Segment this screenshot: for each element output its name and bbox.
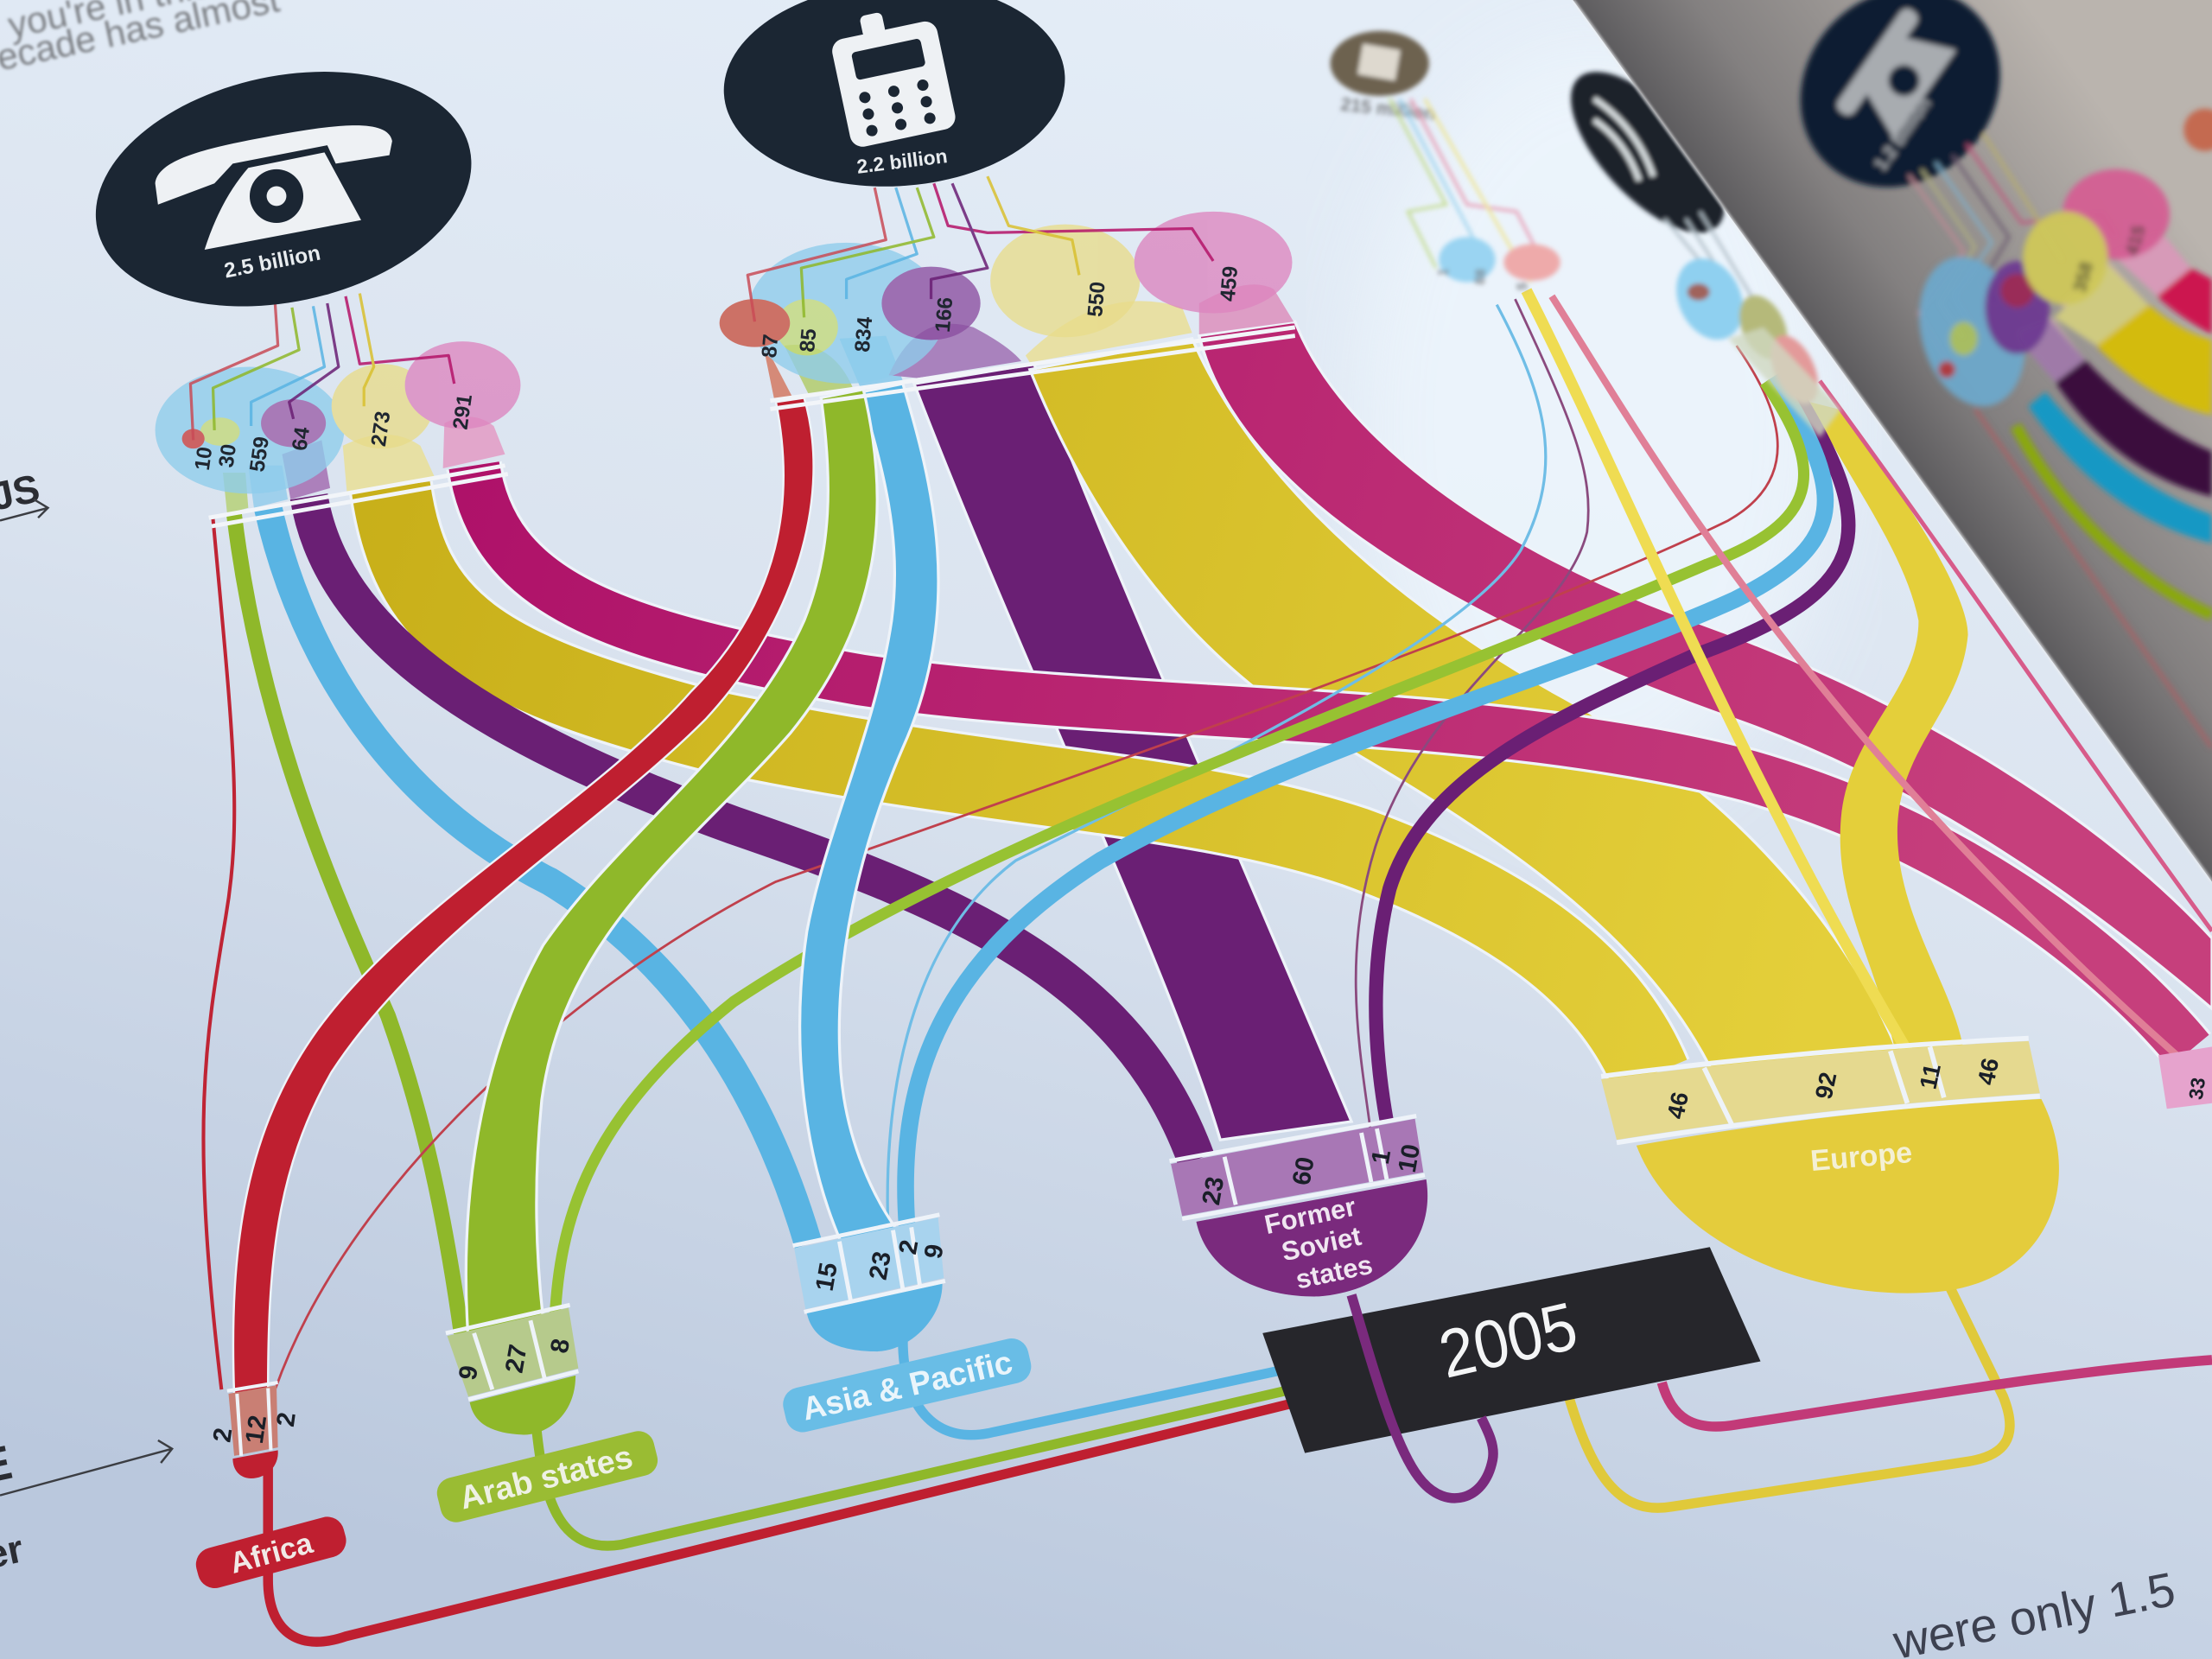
line: former Soviet loop (1351, 1295, 1493, 1498)
head: former Soviet states (1196, 1179, 1427, 1296)
values: former Soviet states: 10 (1393, 1142, 1426, 1175)
values: fixed lines: 10 (191, 445, 217, 472)
fade stubs under fixed lines bubbles (223, 416, 505, 513)
values: former Soviet states: 23 (1197, 1174, 1230, 1207)
values: Europe (1662, 1056, 2004, 1122)
values: fixed lines (191, 393, 477, 474)
band: fixed lines to Europe (391, 486, 1650, 1075)
mobile bands on top (233, 384, 938, 1394)
region: former Soviet states (1169, 1116, 1427, 1296)
circle: internet 215 million (1331, 31, 1429, 96)
values: internet: 5 (1515, 282, 1530, 291)
values: Asia and Pacific: 15 (810, 1261, 843, 1294)
label: former Soviet states: Former (1262, 1192, 1358, 1240)
line: Africa (268, 1403, 1291, 1642)
values: Arab states: 9 (454, 1363, 484, 1382)
label: former Soviet states: states (1293, 1249, 1375, 1295)
cluster: mobile bubbles (720, 176, 1295, 409)
values: right page (2070, 223, 2150, 295)
region: Asia and Pacific (779, 1215, 1034, 1435)
line: Asia and Pacific (903, 1340, 1277, 1435)
band: mobile to Arab states (466, 390, 877, 1340)
value: Americas 33: 33 (2184, 1076, 2209, 1101)
values: internet: 1 (1435, 268, 1452, 276)
values: Asia and Pacific (810, 1237, 950, 1294)
values: mobile: 85 (796, 327, 821, 353)
cluster: fixed lines bubbles (156, 294, 520, 526)
band: mobile to Asia and Pacific (800, 384, 938, 1242)
label: 215 million: 215 million (1339, 94, 1436, 124)
page highlight near spine (1354, 42, 1834, 804)
band: mobile to Europe (1030, 339, 1897, 1075)
line: Europe (1569, 1287, 2010, 1508)
band: right page green (2016, 426, 2212, 615)
region lines to year box (268, 1287, 2010, 1642)
band: mobile to Americas (1199, 321, 2212, 1008)
right page (1573, 0, 2212, 881)
flow: internet to Americas (1552, 296, 2212, 1086)
values: fixed lines: 291 (449, 393, 477, 431)
bands from fixed lines (203, 466, 2190, 1389)
bubbles: internet values (1439, 237, 1496, 283)
flow: wireless to Arab states (555, 382, 1804, 1333)
connector lines: fixed lines (190, 294, 454, 440)
values: Asia and Pacific: 9 (918, 1242, 950, 1261)
flow: broadband to Africa (275, 346, 1777, 1389)
region: Arab states (434, 1305, 661, 1526)
icon: mobile phone (826, 1, 957, 149)
slots: former Soviet states (1171, 1119, 1423, 1216)
slots: Africa (228, 1385, 278, 1456)
band: right page purple (2056, 359, 2212, 497)
label: Arab states (434, 1427, 661, 1526)
band: mobile to Africa (233, 397, 814, 1394)
values: mobile: 550 (1084, 281, 1110, 318)
slot stripe: mobile (770, 327, 1295, 409)
flow: internet thin to Asia and Pacific (887, 305, 1546, 1242)
values: former Soviet states: 1 (1366, 1147, 1396, 1166)
stubs: wireless (1728, 327, 1841, 437)
flow: wireless to Americas edge (1820, 381, 2212, 931)
values: Africa: 2 (271, 1410, 302, 1428)
band: right page cyan (2029, 392, 2212, 543)
values: fixed lines: 273 (367, 410, 395, 448)
label: former Soviet states (1262, 1192, 1375, 1295)
line: Arab states (536, 1389, 1291, 1546)
connector lines: mobile (747, 176, 1213, 321)
fade stubs: right page (2018, 232, 2191, 382)
values: Europe: 92 (1810, 1070, 1841, 1102)
band: mobile to former Soviet states (914, 364, 1351, 1140)
annotation: left side labels and arrows (0, 466, 172, 1577)
slots: Arab states (448, 1307, 578, 1396)
flow: internet thin to former Soviet states (1356, 299, 1588, 1135)
head: Africa (232, 1450, 278, 1478)
region: Europe (1601, 1039, 2059, 1294)
label: former Soviet states: Soviet (1279, 1221, 1363, 1267)
region: Americas slot fragment (2158, 1046, 2212, 1109)
slot stripe: fixed lines (209, 466, 508, 526)
label: right page 1.2 billion: 1.2 billion (1871, 94, 1936, 175)
icon: right page telephone (1834, 5, 1961, 146)
values: Europe: 11 (1915, 1061, 1946, 1091)
values: Europe: 46 (1972, 1056, 2004, 1087)
cluster: wireless, blurred near the spine (1546, 48, 1841, 437)
label: 2.2 billion: 2.2 billion (855, 144, 949, 178)
values: mobile: 459 (1217, 265, 1243, 302)
values: fixed lines: 64 (288, 425, 315, 452)
spine page edge highlight (1573, 0, 2212, 881)
label: 2.5 billion: 2.5 billion (222, 241, 322, 283)
head: Europe (1637, 1099, 2059, 1294)
values: mobile: 834 (851, 315, 877, 353)
year text: 2005 (1432, 1287, 1584, 1393)
label: Arab states: Arab states (456, 1438, 636, 1516)
values: Asia and Pacific: 23 (864, 1249, 897, 1282)
band: wireless to Europe (1810, 402, 1968, 1061)
values: Africa: 2 (207, 1426, 238, 1444)
circle: mobile 2.2 billion (719, 0, 1071, 195)
values: Africa: 12 (240, 1414, 272, 1446)
bubbles: wireless values (1664, 248, 1756, 351)
region: Africa (192, 1382, 350, 1592)
values: former Soviet states (1197, 1142, 1426, 1207)
icon: wifi arcs (1594, 99, 1653, 181)
line: Americas into year box (1662, 1360, 2212, 1427)
values: right page: 358 (2070, 260, 2097, 295)
circle: fixed lines 2.5 billion (73, 39, 493, 339)
line: right page thin red (1975, 409, 2212, 747)
flow: internet to Europe (1527, 290, 1907, 1051)
label: Asia and Pacific: Asia & Pacific (798, 1344, 1016, 1427)
label box: 2005 (1262, 1247, 1761, 1453)
head: Arab states (470, 1376, 575, 1434)
connector lines: wireless (1665, 212, 1777, 339)
band: right page yellow (2096, 305, 2212, 415)
fade stubs under mobile bubbles (762, 284, 1294, 401)
bubbles: fixed lines values (156, 341, 520, 493)
band: right page crimson (2157, 268, 2212, 334)
large bands from mobile (914, 321, 2212, 1140)
icon: computer (1357, 43, 1401, 80)
band: fixed lines to Americas (474, 466, 2190, 1051)
circle: right page 1.2 billion (1759, 0, 2041, 228)
values: Africa (207, 1410, 302, 1446)
label: Africa (192, 1513, 350, 1592)
values: Arab states: 27 (499, 1342, 533, 1375)
flow: wireless to Asia and Pacific (906, 377, 1825, 1227)
band: fixed lines to Arab states (234, 515, 461, 1333)
values: internet (1435, 268, 1530, 291)
values: Arab states: 8 (545, 1337, 575, 1356)
head: Asia and Pacific (807, 1284, 943, 1351)
right page blurred chart (1759, 0, 2212, 747)
values: mobile: 87 (758, 334, 783, 359)
band: fixed lines to former Soviet states (309, 497, 1196, 1160)
bubbles: right page (1904, 109, 2212, 418)
slots: Europe (1601, 1041, 2040, 1140)
cluster: internet, blurred in the distance (1331, 31, 1560, 291)
values: internet: 88 (1472, 268, 1489, 285)
label: Europe: Europe (1809, 1136, 1914, 1178)
thin internet and broadband flows (275, 290, 2212, 1389)
slots: Asia and Pacific (794, 1217, 944, 1309)
connector lines: right page (1909, 134, 2116, 365)
band: fixed lines to Asia and Pacific (268, 508, 809, 1244)
values: Asia and Pacific: 2 (893, 1237, 924, 1256)
values: right page: 415 (2122, 223, 2150, 257)
connector lines: internet (1389, 99, 1535, 283)
flow: wireless to former Soviet states (1376, 395, 1848, 1122)
values: Europe: 46 (1662, 1090, 1694, 1122)
circle: wireless (1546, 48, 1750, 257)
bubbles: mobile values (720, 212, 1293, 384)
values: former Soviet states: 60 (1287, 1154, 1320, 1187)
values: mobile: 166 (931, 296, 957, 334)
values: mobile (758, 265, 1243, 359)
values: fixed lines: 30 (215, 442, 241, 469)
band: fixed lines to Africa (203, 519, 234, 1389)
values: Arab states (454, 1337, 575, 1382)
label: Africa: Africa (226, 1527, 317, 1580)
values: fixed lines: 559 (246, 435, 274, 474)
icon: rotary telephone (156, 125, 392, 250)
